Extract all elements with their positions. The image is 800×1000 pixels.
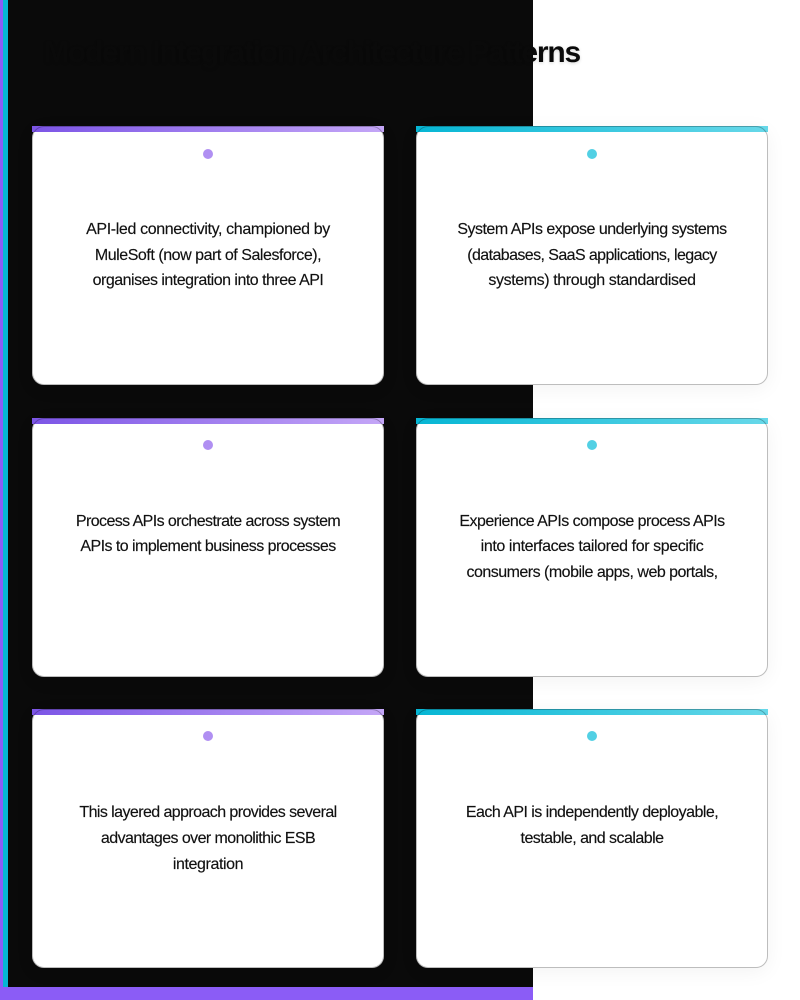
dark background panel — [0, 0, 533, 1000]
card text: API-led connectivity, championed by — [86, 221, 330, 238]
left accent strip: cyan — [3, 0, 8, 987]
card: independently deployable — [416, 709, 768, 968]
card dot marker — [587, 440, 597, 450]
card dot marker — [203, 440, 213, 450]
card text: organises integration into three API — [93, 272, 323, 289]
card text: This layered approach provides several — [79, 804, 337, 821]
card text: advantages over monolithic ESB — [101, 830, 315, 847]
card dot marker — [203, 731, 213, 741]
card text: systems) through standardised — [488, 272, 696, 289]
card text: APIs to implement business processes — [80, 538, 336, 555]
card text — [76, 513, 340, 555]
card accent bar — [416, 709, 768, 715]
card: System APIs — [416, 126, 768, 385]
card text: Each API is independently deployable, — [466, 804, 718, 821]
card dot marker — [203, 149, 213, 159]
card accent bar — [32, 709, 384, 715]
card text: into interfaces tailored for specific — [481, 538, 703, 555]
title: Modern Integration Architecture Patterns — [44, 36, 580, 69]
card text: consumers (mobile apps, web portals, — [466, 564, 718, 581]
card outline — [416, 418, 768, 677]
card text — [459, 513, 725, 581]
card text: (databases, SaaS applications, legacy — [467, 247, 717, 264]
card dot marker — [587, 731, 597, 741]
card text — [457, 221, 727, 289]
card: API-led connectivity — [32, 126, 384, 385]
card text — [86, 221, 330, 289]
card text — [79, 804, 337, 873]
card outline — [32, 709, 384, 968]
card accent bar — [416, 126, 768, 132]
card text: testable, and scalable — [521, 830, 663, 847]
card text: Experience APIs compose process APIs — [459, 513, 725, 530]
card accent bar — [32, 418, 384, 424]
card outline — [416, 126, 768, 385]
card accent bar — [32, 126, 384, 132]
card dot marker — [587, 149, 597, 159]
card text: MuleSoft (now part of Salesforce), — [95, 247, 321, 264]
card text: System APIs expose underlying systems — [457, 221, 727, 238]
left accent strip: purple — [0, 0, 3, 1000]
card text: Process APIs orchestrate across system — [76, 513, 340, 530]
card: layered approach — [32, 709, 384, 968]
card text — [466, 804, 718, 847]
card: Process APIs — [32, 418, 384, 677]
card text: integration — [173, 856, 243, 873]
bottom accent strip — [0, 987, 533, 1000]
card accent bar — [416, 418, 768, 424]
card outline — [32, 418, 384, 677]
card: Experience APIs — [416, 418, 768, 677]
card outline — [416, 709, 768, 968]
card outline — [32, 126, 384, 385]
